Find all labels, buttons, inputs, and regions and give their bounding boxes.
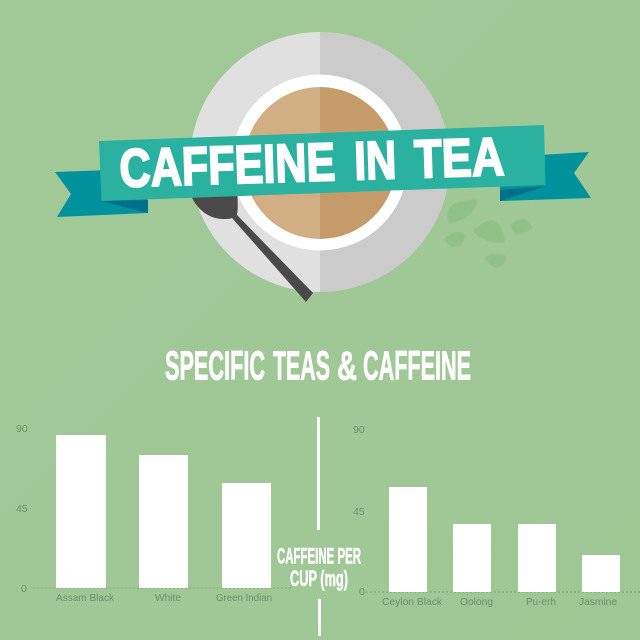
heading: TEAS bbox=[273, 342, 330, 388]
bar: Assam Black bbox=[56, 435, 106, 588]
tea bbox=[244, 87, 396, 239]
category labels: White bbox=[155, 592, 181, 604]
title: CAFFEINE bbox=[118, 132, 336, 199]
category labels bbox=[382, 596, 617, 608]
category labels: Jasmine bbox=[579, 596, 617, 608]
centre divider: lower bbox=[318, 599, 321, 636]
left ribbon fold bbox=[101, 200, 148, 213]
icon: spoon bbox=[192, 190, 313, 302]
baseline bbox=[366, 591, 640, 593]
illustration: tea cup on saucer bbox=[190, 32, 450, 302]
y axis labels bbox=[16, 423, 28, 595]
title bbox=[118, 127, 505, 199]
y axis labels: 45 bbox=[353, 506, 365, 518]
title: IN bbox=[353, 130, 397, 192]
category labels: Assam Black bbox=[56, 592, 115, 604]
cup rim bbox=[232, 74, 408, 250]
heading: & bbox=[337, 342, 357, 388]
heading bbox=[165, 342, 471, 388]
bar: Oolong bbox=[453, 524, 491, 592]
y axis labels: 90 bbox=[16, 423, 28, 435]
category labels: Ceylon Black bbox=[382, 596, 443, 608]
bar chart: left bbox=[16, 423, 292, 604]
heading: SPECIFIC bbox=[165, 342, 265, 388]
title: TEA bbox=[413, 127, 505, 190]
y axis labels: 0 bbox=[21, 583, 27, 595]
category labels: Oolong bbox=[460, 596, 493, 608]
y axis labels: 0 bbox=[359, 586, 365, 598]
banner: title ribbon bbox=[55, 125, 591, 217]
bar: Ceylon Black bbox=[389, 487, 427, 592]
axis title: caffeine per cup bbox=[277, 544, 361, 591]
y axis labels: 90 bbox=[353, 424, 365, 436]
axis title: caffeine per cup: CUP (mg) bbox=[290, 566, 348, 591]
y axis labels: 45 bbox=[16, 503, 28, 515]
category labels: Green Indian bbox=[216, 592, 272, 604]
ribbon main band bbox=[99, 125, 546, 201]
category labels: Pu-erh bbox=[526, 596, 556, 608]
bar: Jasmine bbox=[582, 555, 620, 592]
icon: leaves bbox=[444, 200, 532, 268]
bar: White bbox=[139, 455, 188, 588]
left ribbon tail bbox=[55, 170, 148, 217]
y axis labels bbox=[353, 424, 365, 598]
right ribbon tail bbox=[500, 152, 591, 201]
centre divider: upper bbox=[317, 417, 320, 530]
saucer bbox=[190, 32, 450, 292]
right ribbon fold bbox=[500, 186, 546, 201]
bar: Green Indian bbox=[222, 483, 271, 588]
bar chart: right bbox=[353, 424, 640, 608]
category labels bbox=[56, 592, 272, 604]
axis title: caffeine per cup: CAFFEINE PER bbox=[277, 544, 361, 568]
heading: CAFFEINE bbox=[363, 342, 471, 388]
baseline bbox=[33, 587, 292, 589]
bar: Pu-erh bbox=[518, 524, 556, 592]
